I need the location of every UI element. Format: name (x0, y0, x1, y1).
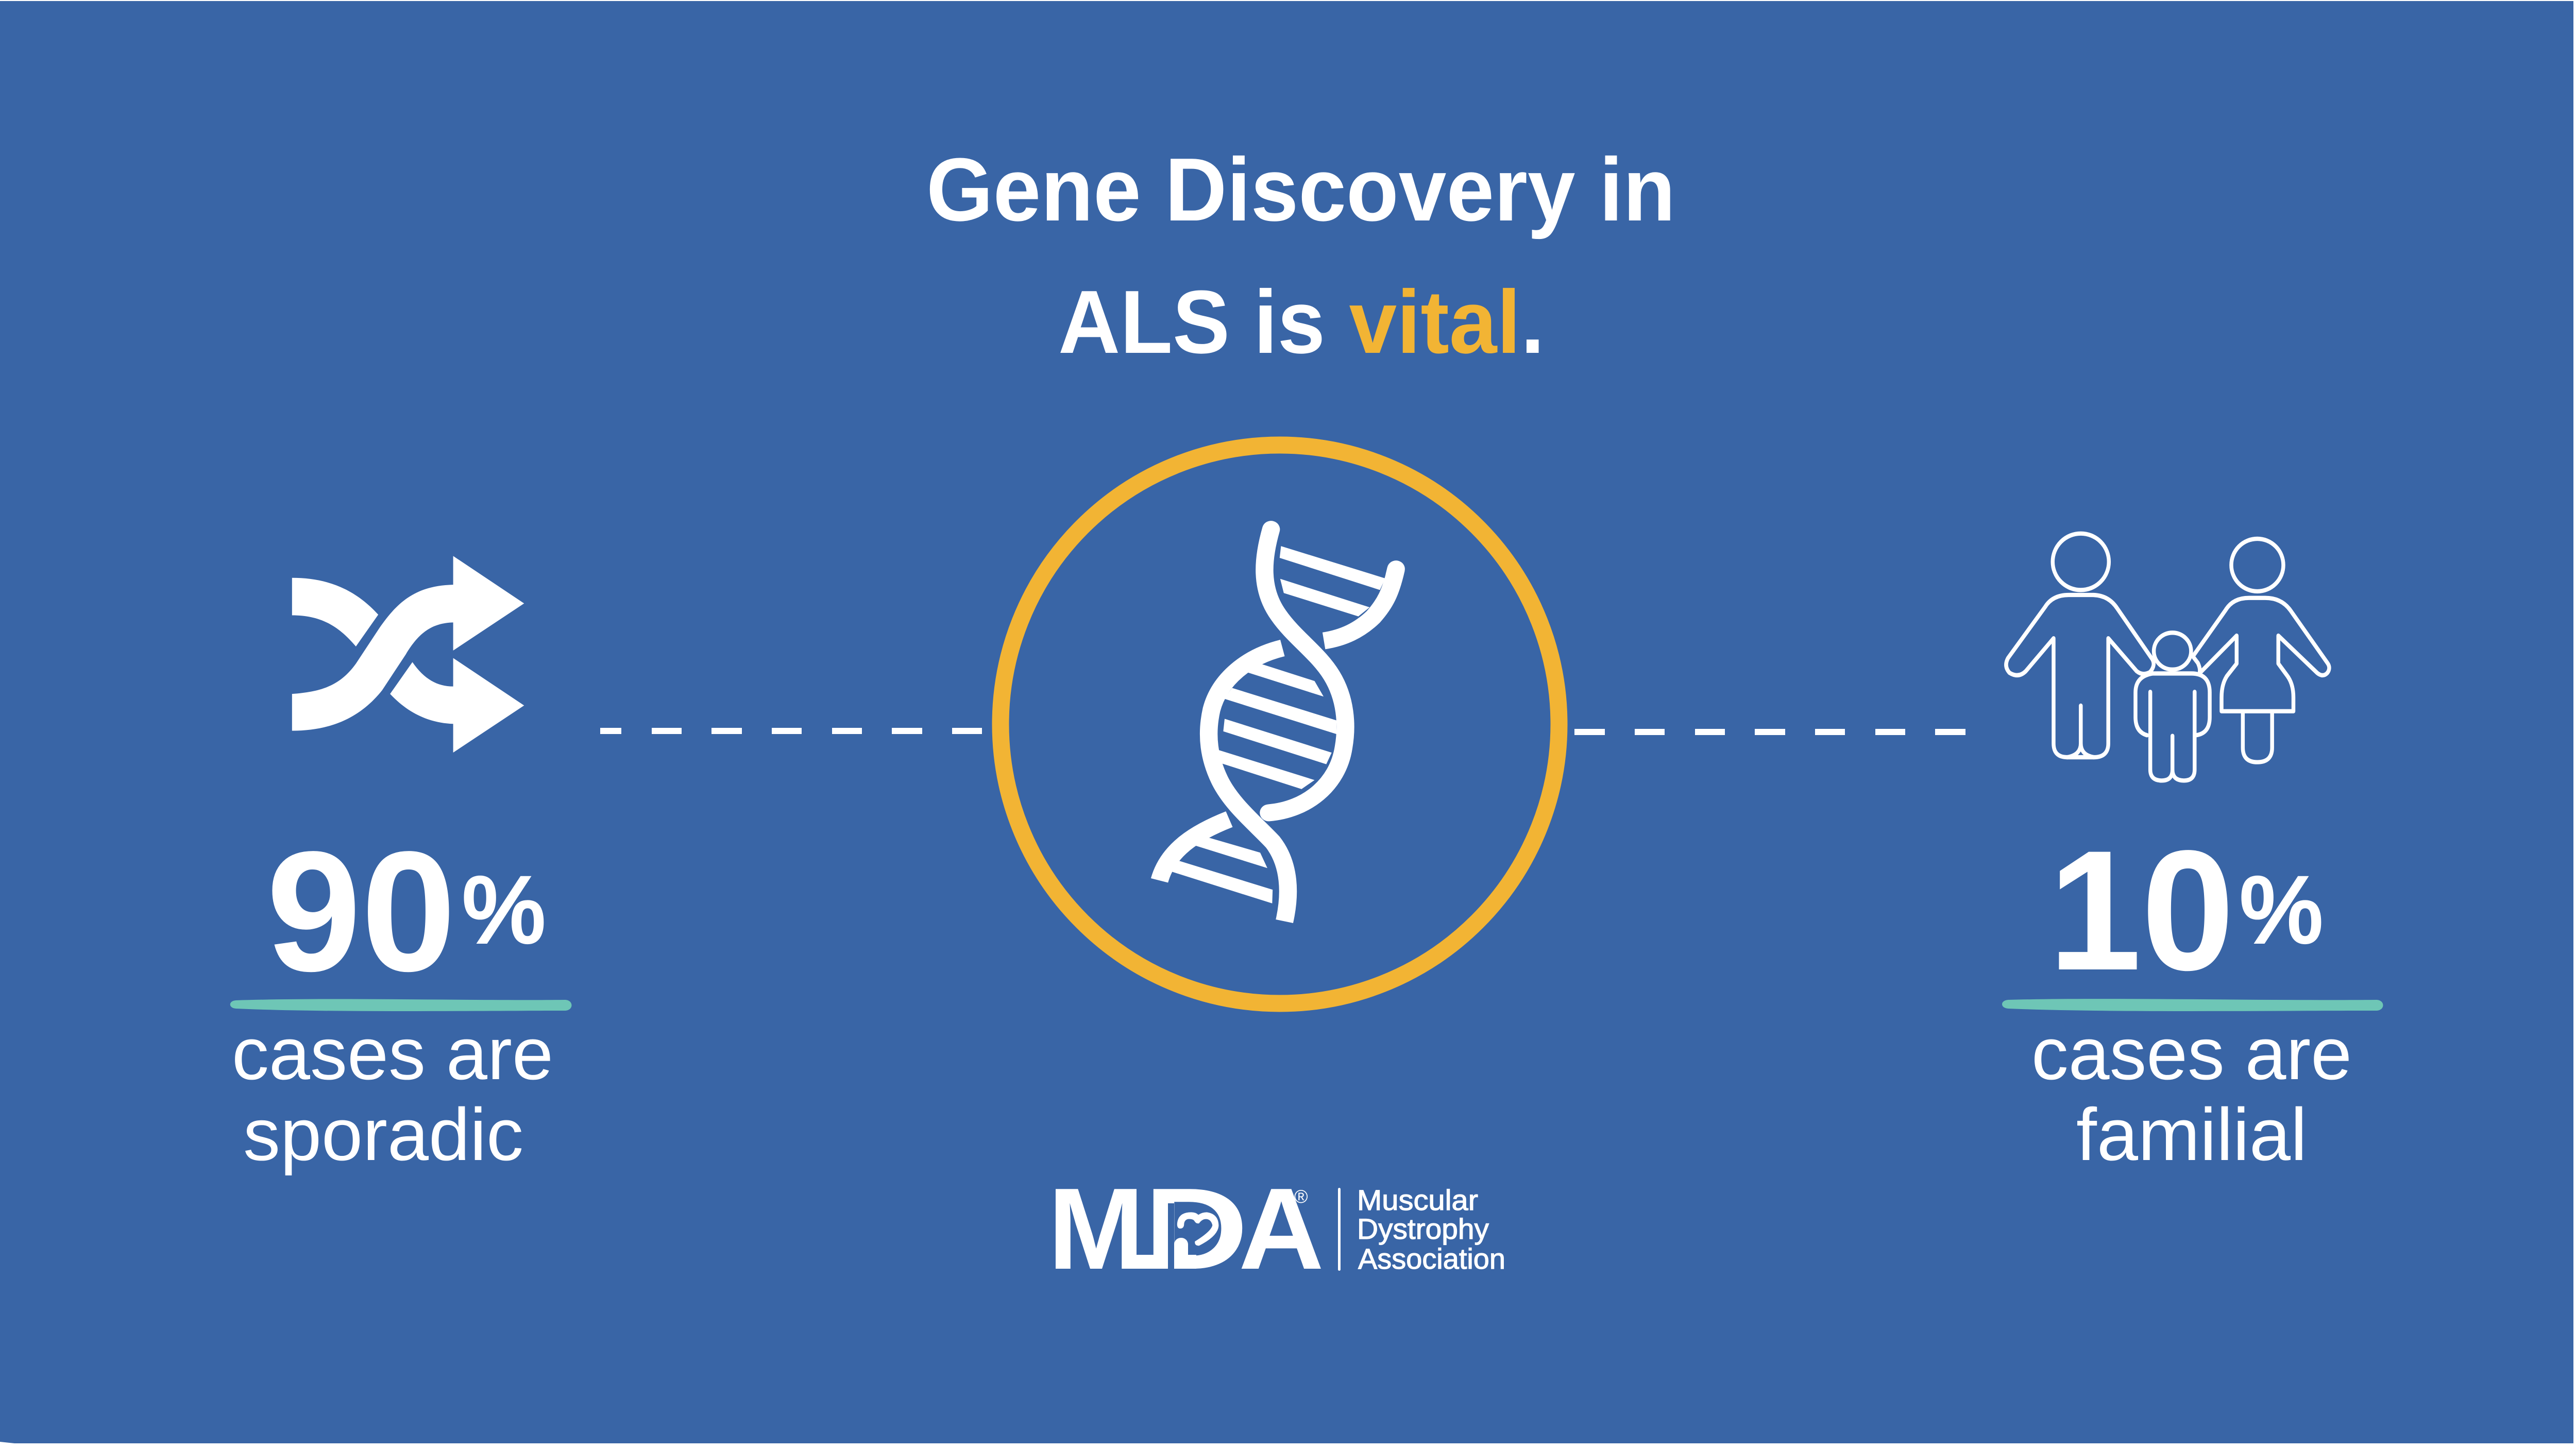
underline: familial (2002, 999, 2383, 1011)
icon: shuffle arrows (292, 556, 524, 753)
text: cases are familial: familial (2076, 1093, 2307, 1176)
title: Gene Discovery in (926, 139, 1675, 240)
logo: MDA: M (1048, 1164, 1144, 1293)
statistic: 10%: 10 (2048, 815, 2234, 1006)
logo wordmark: Muscular Dystrophy Association: Dystrophy (1357, 1213, 1489, 1245)
text: cases are sporadic (232, 1012, 553, 1176)
underline: sporadic (230, 999, 572, 1011)
text: cases are sporadic: sporadic (243, 1093, 523, 1176)
logo wordmark: Muscular Dystrophy Association: Muscular (1357, 1184, 1478, 1216)
left dashed connector (600, 728, 982, 734)
statistic: 90% (266, 816, 546, 1007)
title: ALS is vital. (1058, 271, 1545, 372)
logo: MDA: D (1144, 1164, 1248, 1293)
statistic: 10%: % (2240, 857, 2323, 962)
text: cases are sporadic: cases are (232, 1012, 553, 1095)
text: cases are familial: cases are (2031, 1012, 2352, 1095)
logo: MDA (1048, 1164, 1324, 1293)
title (926, 139, 1675, 372)
logo wordmark: Muscular Dystrophy Association: Association (1358, 1242, 1505, 1275)
gold circle (1001, 445, 1559, 1003)
logo: MDA: A (1239, 1164, 1324, 1293)
text: cases are familial (2031, 1012, 2352, 1176)
icon: DNA helix (1160, 530, 1396, 921)
statistic: 90%: % (462, 857, 546, 962)
icon: family (2006, 534, 2329, 780)
right dashed connector (1574, 729, 1965, 735)
statistic: 10% (2048, 815, 2323, 1006)
logo: MDA: ® (1294, 1186, 1308, 1207)
logo divider (1338, 1188, 1341, 1271)
logo wordmark: Muscular Dystrophy Association (1357, 1184, 1505, 1275)
statistic: 90%: 90 (266, 816, 456, 1007)
